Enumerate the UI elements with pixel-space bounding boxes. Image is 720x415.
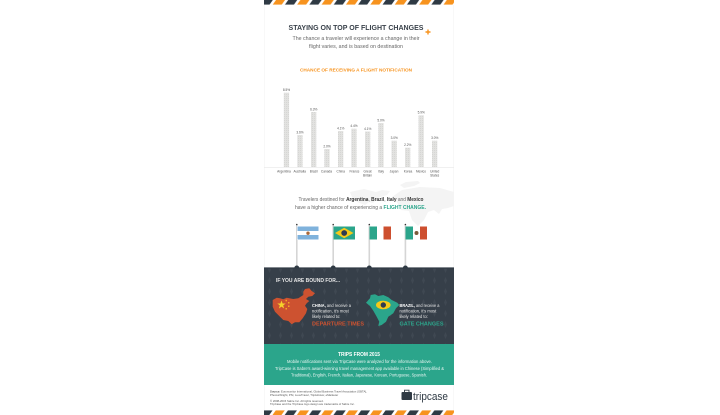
top hazard stripe bbox=[264, 0, 454, 5]
Brazil text: notification, it's most bbox=[400, 308, 437, 313]
China text: likely related to: bbox=[312, 314, 340, 319]
bar chart: Australia bbox=[293, 170, 306, 174]
bar chart bbox=[264, 88, 454, 178]
flag: Brazil bbox=[332, 224, 355, 267]
bar chart: 2.2% bbox=[404, 143, 411, 147]
heading: IF YOU ARE BOUND FOR... bbox=[276, 278, 341, 284]
icon: Brazil map bbox=[366, 294, 399, 326]
bar chart: 3.0% bbox=[431, 136, 438, 140]
bar chart: Great bbox=[364, 170, 372, 174]
bar chart: 6.3% bbox=[310, 108, 317, 112]
bar chart: United bbox=[430, 170, 440, 174]
teal panel: trips from 2015 bbox=[264, 344, 454, 385]
bar chart: China bbox=[337, 170, 345, 174]
destinations text: Travelers destined for Argentina, Brazil, Italy and Mexico bbox=[298, 197, 425, 203]
footer sources: TripCase and the TripCase logo design are trademarks of Sabre Inc. bbox=[270, 402, 355, 406]
destinations text: have a higher chance of experiencing a FLIGHT CHANGE. bbox=[295, 205, 428, 211]
page edge lines bbox=[264, 5, 454, 410]
bar chart: 2.0% bbox=[323, 144, 331, 148]
China text: notification, it's most bbox=[312, 308, 350, 313]
Brazil text: BRAZIL, and receive a bbox=[400, 303, 441, 308]
flag: Mexico bbox=[405, 224, 427, 267]
logo: tripcase: tripcase bbox=[413, 391, 448, 403]
icon: China map bbox=[273, 288, 315, 324]
footer sources: © 2008-2015 Sabre Inc. All rights reserved. bbox=[270, 399, 324, 403]
bar chart: 4.1% bbox=[337, 126, 344, 130]
chart heading: CHANCE OF RECEIVING A FLIGHT NOTIFICATION bbox=[300, 68, 413, 72]
bar chart: Italy bbox=[378, 170, 384, 174]
bar chart: Canada bbox=[321, 170, 332, 174]
bar chart: Brazil bbox=[310, 170, 318, 174]
China callout: DEPARTURE TIMES bbox=[312, 321, 364, 327]
bar chart: 3.0% bbox=[391, 136, 398, 140]
logo: tripcase bbox=[402, 390, 448, 403]
bar chart: Korea bbox=[404, 170, 412, 174]
bar chart: 4.1% bbox=[364, 127, 371, 131]
Brazil text: likely related to: bbox=[400, 314, 428, 319]
footer sources: Source: Euromonitor International, Global Business Travel Association (GBTA), bbox=[270, 390, 368, 394]
subtitle: The chance a traveler will experience a change in their bbox=[292, 36, 420, 42]
icon: orange plus bbox=[426, 30, 430, 34]
bar chart: 5.9% bbox=[418, 111, 425, 115]
bar chart: 8.5% bbox=[283, 88, 290, 92]
China text: CHINA, and receive a bbox=[312, 303, 352, 308]
title: STAYING ON TOP OF FLIGHT CHANGES bbox=[288, 23, 424, 32]
bar chart: States bbox=[430, 174, 440, 178]
dark panel: if you are bound for bbox=[264, 266, 454, 344]
bar chart: 4.4% bbox=[350, 124, 358, 128]
footer sources: PhocusWright, PSI, LuxeTravel, TripAdvisor, eMarketer bbox=[270, 393, 338, 397]
bar chart: 5.0% bbox=[377, 118, 385, 122]
subtitle: flight varies, and is based on destination bbox=[309, 44, 403, 50]
bar chart: Japan bbox=[390, 170, 399, 174]
bar chart: 3.6% bbox=[296, 130, 304, 134]
bar chart: Britain bbox=[363, 174, 372, 178]
teal panel: trips from 2015: TripCase is Sabre's award-winning travel management app available in Chinese (Simplified & bbox=[275, 366, 445, 372]
world map backdrop bbox=[350, 181, 454, 226]
bar chart: Mexico bbox=[416, 170, 426, 174]
bottom hazard stripe bbox=[264, 410, 454, 415]
teal panel: trips from 2015: TRIPS FROM 2015 bbox=[338, 352, 380, 358]
flag: Argentina bbox=[296, 224, 319, 267]
bar chart: France bbox=[350, 170, 360, 174]
Brazil callout: GATE CHANGES bbox=[400, 321, 444, 327]
teal panel: trips from 2015: Traditional), English, French, Italian, Japanese, Korean, Portuguese, Spanish. bbox=[291, 372, 427, 378]
bar chart: Argentina bbox=[277, 170, 291, 174]
flag: Italy bbox=[368, 224, 391, 267]
teal panel: trips from 2015: Mobile notifications sent via TripCase were analyzed for the information above. bbox=[287, 359, 432, 365]
